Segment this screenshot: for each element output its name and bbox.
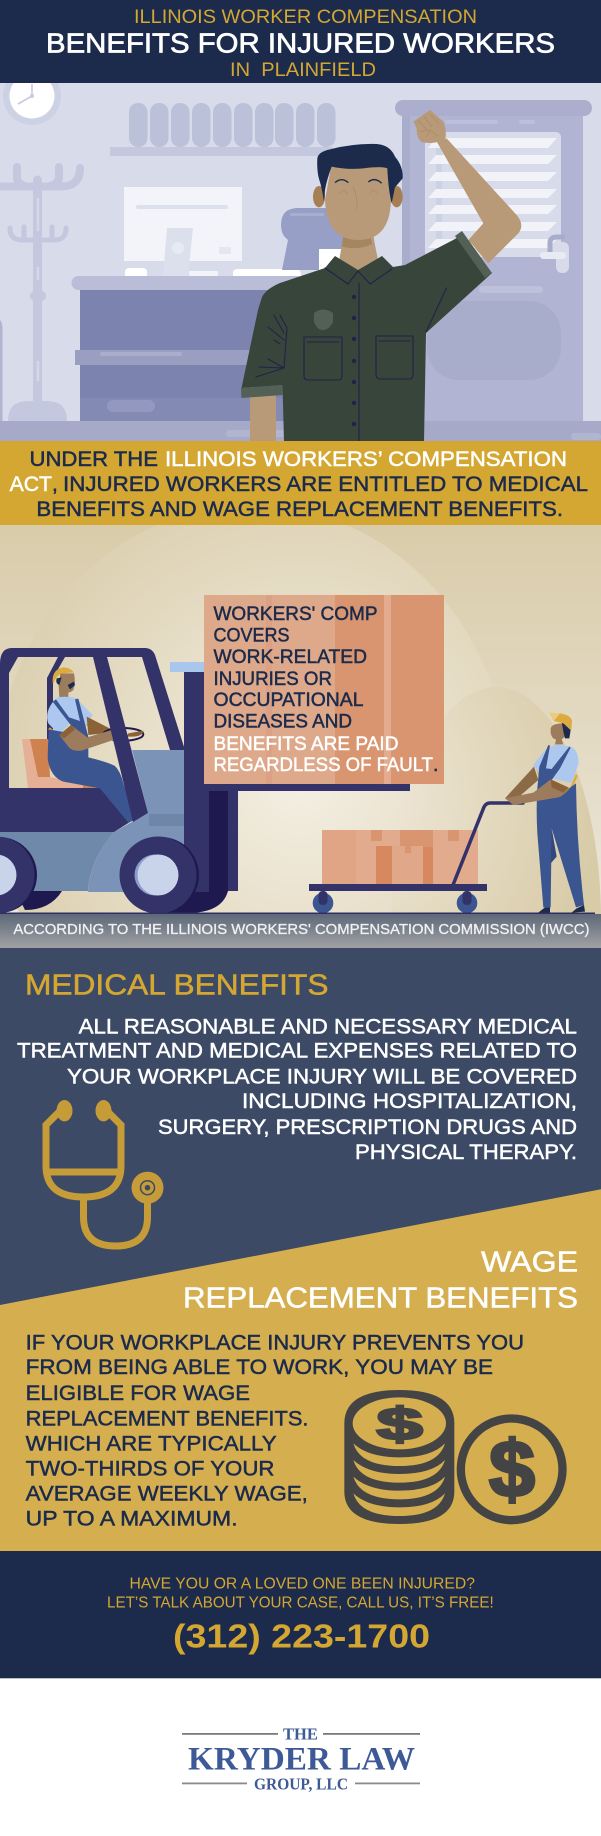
title: BENEFITS FOR INJURED WORKERS: [46, 27, 555, 58]
neck: [338, 235, 379, 272]
icon: stethoscope: [46, 1100, 164, 1246]
wheel shadows: [165, 880, 228, 913]
crate with workers comp text: WORKERS' COMP: [214, 603, 378, 625]
header band: [0, 0, 601, 83]
text block: wage description: IF YOUR WORKPLACE INJURY PREVENTS YOU: [26, 1331, 524, 1355]
crate with workers comp text: [204, 595, 444, 784]
forklift: [0, 648, 410, 914]
panel: act statement band: ILLINOIS WORKERS’ COMPENSATION: [165, 448, 567, 471]
raised arm and fist: [413, 110, 521, 263]
panel: wage replacement benefits: [0, 1189, 601, 1551]
lower body: [0, 832, 114, 891]
text block: wage description: UP TO A MAXIMUM.: [26, 1507, 238, 1531]
mast and fork: [170, 662, 410, 892]
window blinds: [425, 132, 561, 257]
door handle: [540, 237, 569, 273]
shirt: [241, 231, 492, 442]
coat rack: [0, 167, 80, 421]
cab frame: [0, 648, 185, 788]
cab pillar: [93, 657, 148, 822]
source note band: [0, 914, 601, 948]
panel: call to action: LET’S TALK ABOUT YOUR CASE, CALL US, IT’S FREE!: [107, 1594, 494, 1611]
panel: act statement band: BENEFITS AND WAGE REPLACEMENT BENEFITS.: [36, 498, 563, 521]
title: IN PLAINFIELD: [230, 59, 376, 81]
panel: act statement band: UNDER THE: [30, 448, 158, 471]
logo: the kryder law group: KRYDER LAW: [188, 1741, 415, 1777]
icon: coin stack: $: [377, 1398, 423, 1449]
heading: wage replacement benefits: REPLACEMENT BENEFITS: [183, 1283, 578, 1315]
text block: wage description: WHICH ARE TYPICALLY: [26, 1431, 277, 1455]
office chair: [281, 208, 378, 270]
logo: the kryder law group: GROUP, LLC: [254, 1774, 348, 1793]
text block: wage description: REPLACEMENT BENEFITS.: [26, 1406, 308, 1430]
text block: medical description: ALL REASONABLE AND NECESSARY MEDICAL: [79, 1014, 577, 1038]
text block: wage description: FROM BEING ABLE TO WORK, YOU MAY BE: [26, 1355, 493, 1379]
title: ILLINOIS WORKER COMPENSATION: [134, 6, 477, 28]
icon: wall clock: [3, 67, 61, 125]
panel: act statement band: [0, 441, 601, 525]
icon: single coin: $: [489, 1424, 535, 1513]
seat: [22, 739, 100, 788]
logo: the kryder law group: THE: [283, 1724, 318, 1743]
panel: office illustration: [0, 67, 601, 442]
hood: [88, 750, 184, 892]
crate with workers comp text: WORK-RELATED: [214, 646, 367, 668]
heading: medical benefits: MEDICAL BENEFITS: [25, 970, 328, 1002]
reception desk with computer: [0, 187, 310, 421]
crate with workers comp text: INJURIES OR: [214, 668, 332, 690]
text block: medical description: SURGERY, PRESCRIPTION DRUGS AND: [158, 1115, 577, 1139]
text block: medical description: INCLUDING HOSPITALIZATION,: [242, 1089, 577, 1113]
head: [313, 144, 403, 240]
panel: act statement band: ACT: [10, 473, 52, 496]
text block: medical description: [17, 1014, 577, 1164]
cart with boxes: [309, 803, 523, 913]
title: [46, 6, 555, 81]
panel: call to action: [0, 1551, 601, 1678]
text block: wage description: [26, 1331, 524, 1531]
crate with workers comp text: COVERS: [214, 625, 290, 647]
icon: coin stack: [344, 1390, 454, 1524]
text block: wage description: TWO-THIRDS OF YOUR: [26, 1456, 274, 1480]
crate with workers comp text: REGARDLESS OF FAULT: [214, 754, 433, 776]
door: [395, 100, 592, 421]
crate with workers comp text: OCCUPATIONAL: [214, 689, 364, 711]
crate with workers comp text: .: [433, 754, 438, 776]
forklift driver: [47, 667, 143, 823]
panel: act statement band: ,: [52, 473, 58, 496]
floor: [0, 421, 601, 442]
worker with raised fist: [241, 110, 521, 442]
panel: act statement band: INJURED WORKERS ARE ENTITLED TO MEDICAL: [63, 473, 588, 496]
source note band: ACCORDING TO THE ILLINOIS WORKERS' COMPENSATION COMMISSION (IWCC): [13, 922, 589, 938]
lowered arm: [250, 395, 276, 442]
warehouse worker pushing cart: [505, 713, 585, 913]
panel: medical benefits: [0, 948, 601, 1308]
text block: medical description: YOUR WORKPLACE INJURY WILL BE COVERED: [67, 1064, 577, 1088]
text block: medical description: TREATMENT AND MEDICAL EXPENSES RELATED TO: [17, 1039, 577, 1063]
heading: wage replacement benefits: WAGE: [481, 1247, 578, 1279]
floor line: [0, 912, 595, 914]
wheels: [0, 836, 199, 914]
text block: wage description: AVERAGE WEEKLY WAGE,: [26, 1482, 308, 1506]
crate with workers comp text: DISEASES AND: [214, 711, 352, 733]
text block: medical description: PHYSICAL THERAPY.: [355, 1140, 577, 1164]
panel: call to action: HAVE YOU OR A LOVED ONE BEEN INJURED?: [130, 1575, 475, 1592]
shelf with binders: [110, 103, 336, 156]
panel: warehouse illustration: [0, 525, 601, 914]
heading: wage replacement benefits: [183, 1247, 578, 1315]
crate with workers comp text: BENEFITS ARE PAID: [214, 733, 398, 755]
logo: the kryder law group: [182, 1724, 420, 1793]
text block: wage description: ELIGIBLE FOR WAGE: [26, 1381, 250, 1405]
panel: call to action: (312) 223-1700: [173, 1617, 430, 1654]
icon: single coin: [457, 1414, 567, 1524]
